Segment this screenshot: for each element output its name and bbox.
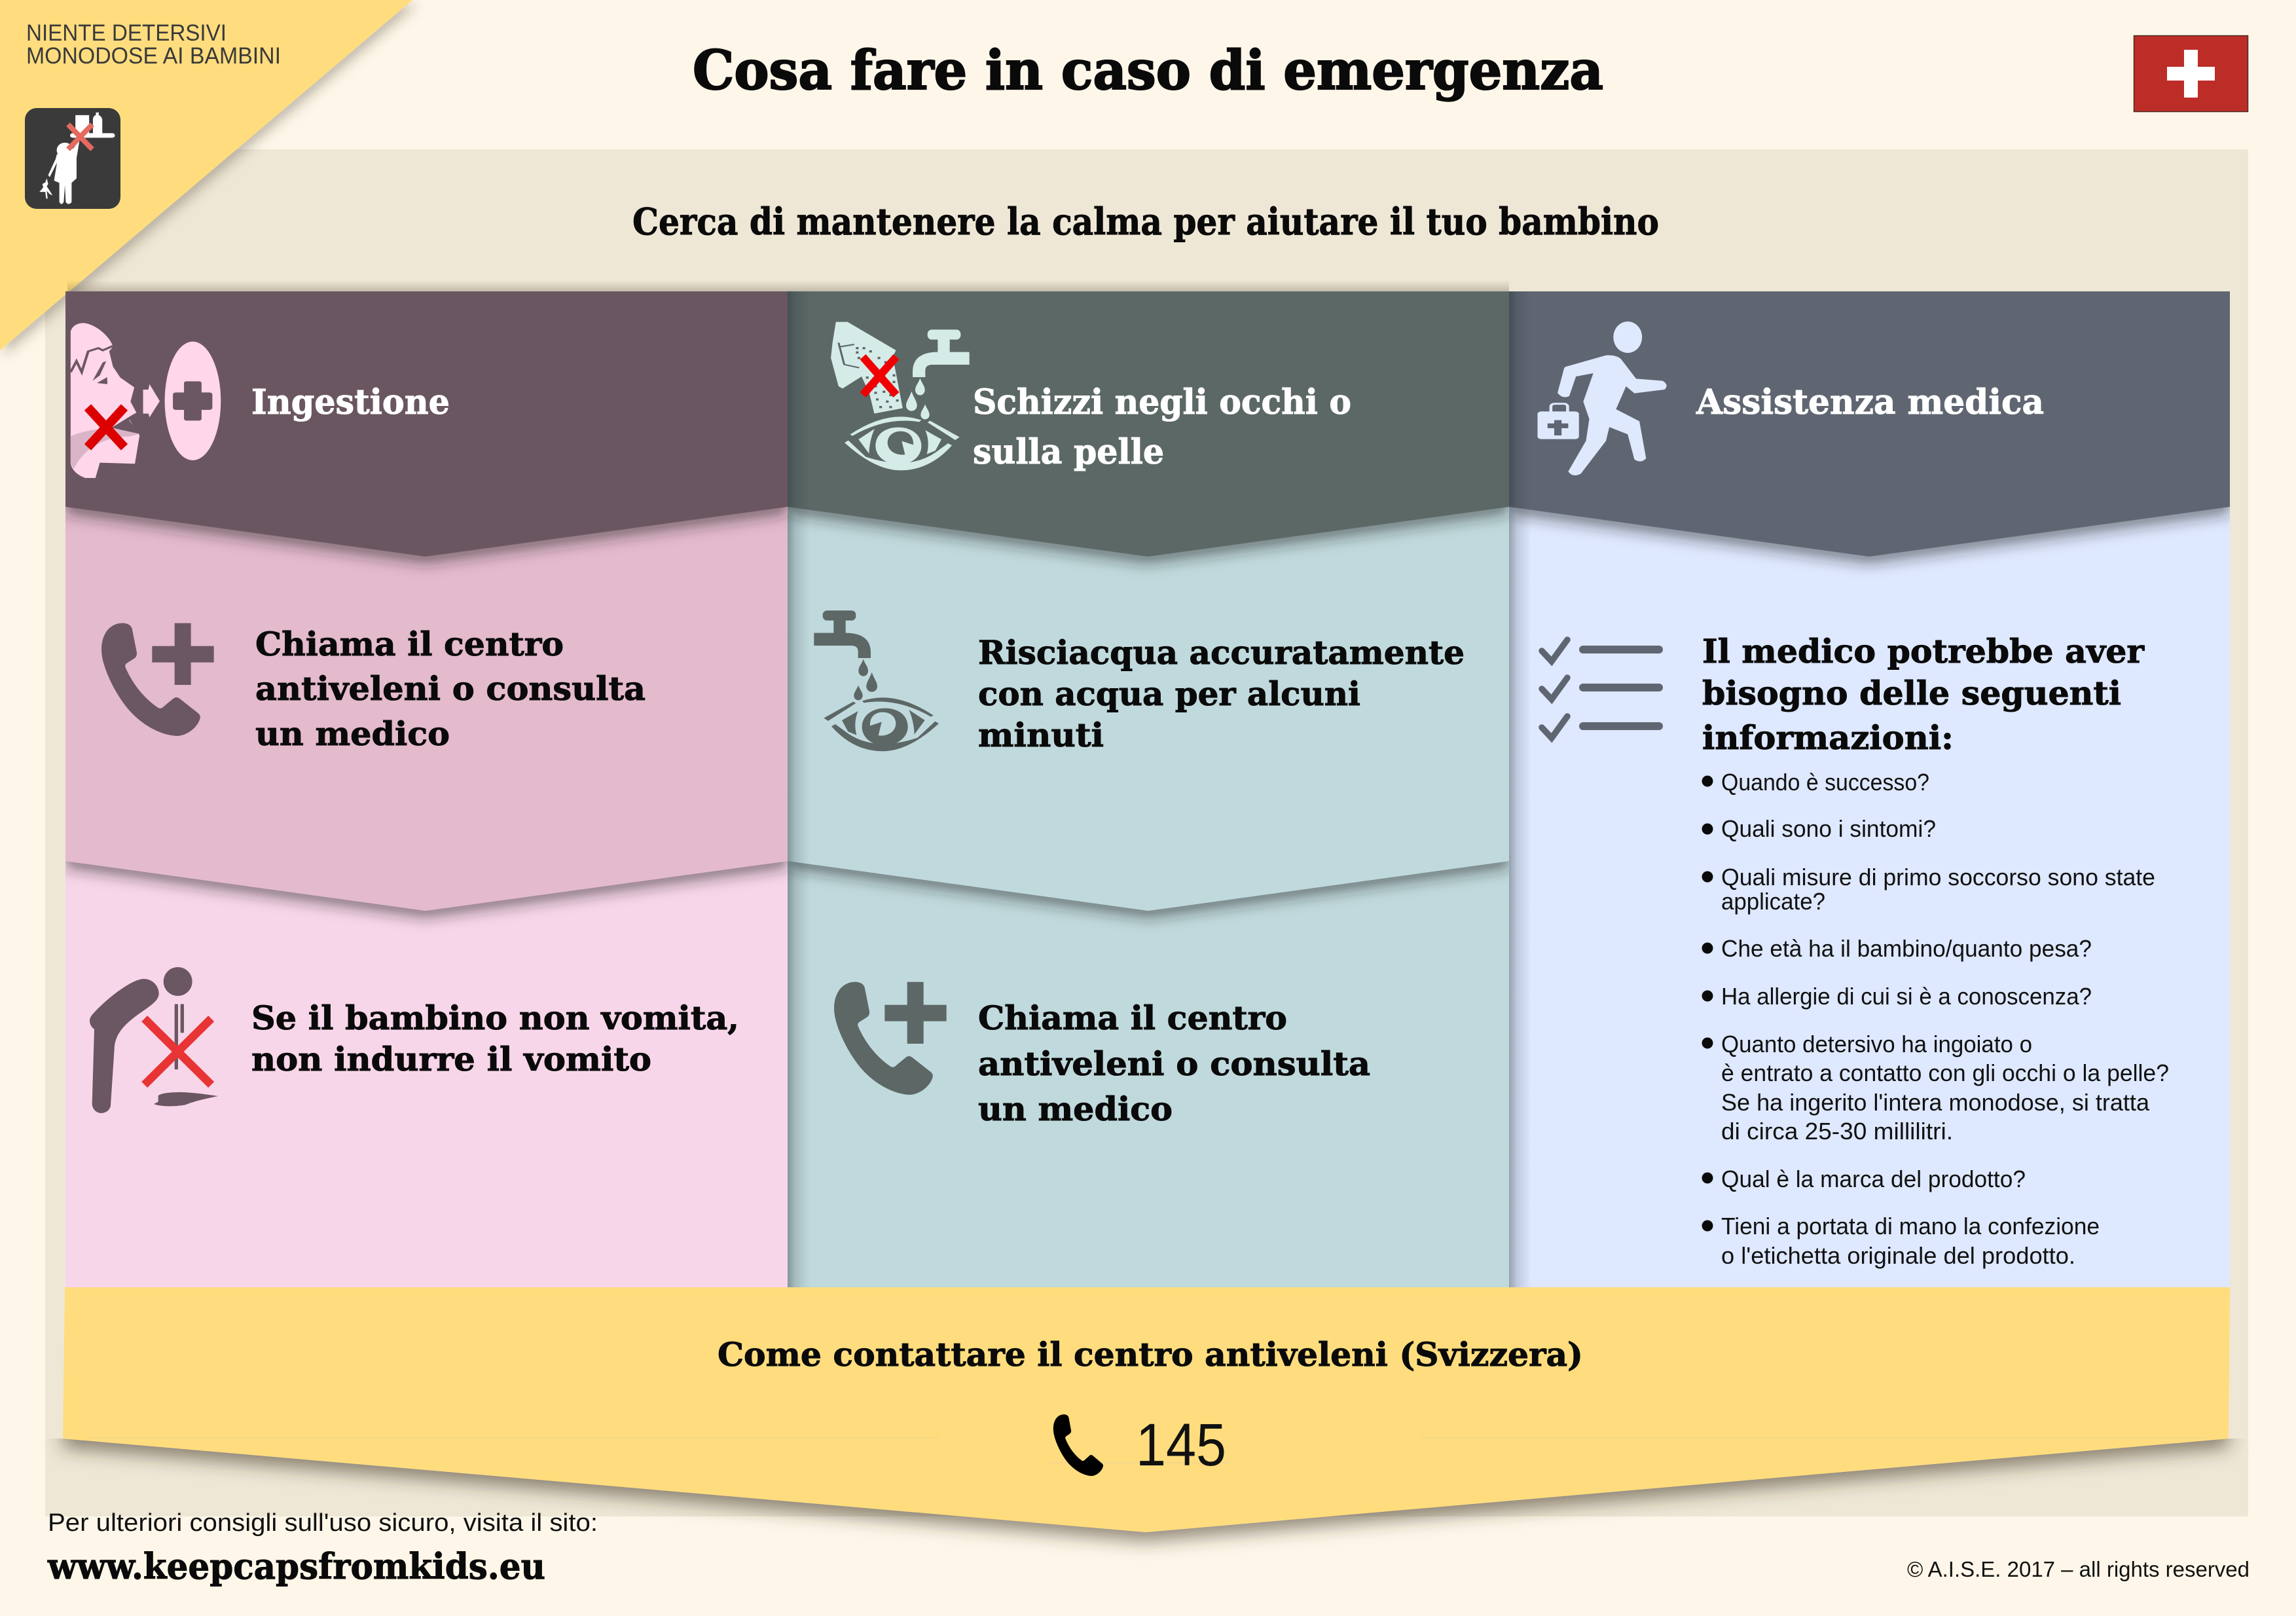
footer: copyright: © A.I.S.E. 2017 – all rights reserved [1907, 1557, 2250, 1581]
list of questions: di circa 25-30 millilitri. [1721, 1118, 1953, 1145]
banner text [26, 20, 281, 69]
footer: further advice [47, 1509, 598, 1587]
list of questions: Ha allergie di cui si è a conoscenza? [1721, 983, 2092, 1010]
panel: column 1 ingestion [65, 291, 788, 1290]
icon: person running with first aid kit [1537, 321, 1667, 475]
list of questions: Tieni a portata di mano la confezione [1721, 1213, 2100, 1240]
list of questions: Quanto detersivo ha ingoiato o [1721, 1031, 2032, 1057]
text: rinse thoroughly [978, 633, 1465, 754]
heading: doctor information: informazioni: [1702, 718, 1954, 757]
text: call poison centre: Chiama il centro [255, 625, 564, 663]
icon: phone with plus [101, 623, 214, 736]
heading: Schizzi negli occhi o sulla pelle [973, 382, 1351, 472]
list of questions: Qual è la marca del prodotto? [1721, 1166, 2026, 1192]
text: call poison centre: Chiama il centro [978, 999, 1287, 1037]
text: rinse thoroughly: minuti [978, 716, 1104, 754]
icon: child reaching for shelf [25, 108, 120, 209]
icon: phone [1053, 1414, 1103, 1476]
text: call poison centre [978, 999, 1370, 1128]
shadow above columns [67, 280, 1509, 291]
heading: doctor information: Il medico potrebbe aver [1702, 632, 2145, 670]
icon: face with cross and medical arrow [71, 323, 221, 478]
icon: checklist [1542, 640, 1659, 738]
list of questions: applicate? [1721, 888, 1825, 915]
icon: tap rinsing eye [814, 610, 939, 751]
text: call poison centre: un medico [255, 714, 450, 753]
text: call poison centre: un medico [978, 1090, 1173, 1128]
heading: doctor information: bisogno delle seguenti [1702, 674, 2121, 712]
text: do not induce vomiting: Se il bambino non vomita, [251, 999, 739, 1037]
footer: further advice: Per ulteriori consigli sull'uso sicuro, visita il sito: [48, 1509, 598, 1537]
phone number: 145 [1136, 1412, 1226, 1478]
subtitle: Cerca di mantenere la calma per aiutare il tuo bambino [632, 200, 1659, 244]
panel: column 3 medical assistance [1509, 291, 2230, 1290]
heading: how to contact: Come contattare il centro antiveleni (Svizzera) [718, 1335, 1583, 1374]
icon: packet, tap and eye [831, 322, 970, 470]
list of questions: Quali sono i sintomi? [1721, 815, 1936, 842]
panel: column 2 splashes in eyes or skin [788, 291, 1509, 1290]
list of questions: Quali misure di primo soccorso sono state [1721, 864, 2155, 891]
list of questions: o l'etichetta originale del prodotto. [1721, 1242, 2075, 1269]
banner text: NIENTE DETERSIVI [26, 20, 227, 46]
heading: Assistenza medica: Assistenza medica [1696, 382, 2044, 422]
icon: phone with plus [834, 982, 947, 1095]
icon: Swiss flag [2134, 35, 2248, 111]
text: do not induce vomiting: non indurre il vomito [251, 1040, 651, 1078]
text: rinse thoroughly: Risciacqua accuratamente [978, 633, 1465, 672]
heading: Schizzi negli occhi o sulla pelle: Schizzi negli occhi o [973, 382, 1351, 422]
icon: do not induce vomiting [90, 967, 218, 1113]
list of questions: Quando è successo? [1721, 769, 1929, 796]
list of questions: Che età ha il bambino/quanto pesa? [1721, 935, 2092, 962]
list of questions: Se ha ingerito l'intera monodose, si tratta [1721, 1089, 2150, 1116]
panel: poison centre contact [63, 1287, 2230, 1532]
text: call poison centre: antiveleni o consulta [978, 1044, 1370, 1083]
text: do not induce vomiting [251, 999, 739, 1078]
banner text: MONODOSE AI BAMBINI [26, 43, 281, 69]
heading: Ingestione: Ingestione [251, 382, 450, 422]
corner banner: yellow triangle [0, 0, 412, 350]
text: call poison centre [255, 625, 646, 753]
list of questions [1702, 769, 2169, 1269]
heading: Schizzi negli occhi o sulla pelle: sulla pelle [973, 432, 1164, 472]
list of questions: è entrato a contatto con gli occhi o la pelle? [1721, 1059, 2169, 1086]
footer: further advice: www.keepcapsfromkids.eu [47, 1545, 545, 1587]
heading: doctor information [1702, 632, 2145, 757]
title: Cosa fare in caso di emergenza [693, 39, 1603, 102]
text: call poison centre: antiveleni o consulta [255, 669, 646, 708]
text: rinse thoroughly: con acqua per alcuni [978, 674, 1360, 713]
